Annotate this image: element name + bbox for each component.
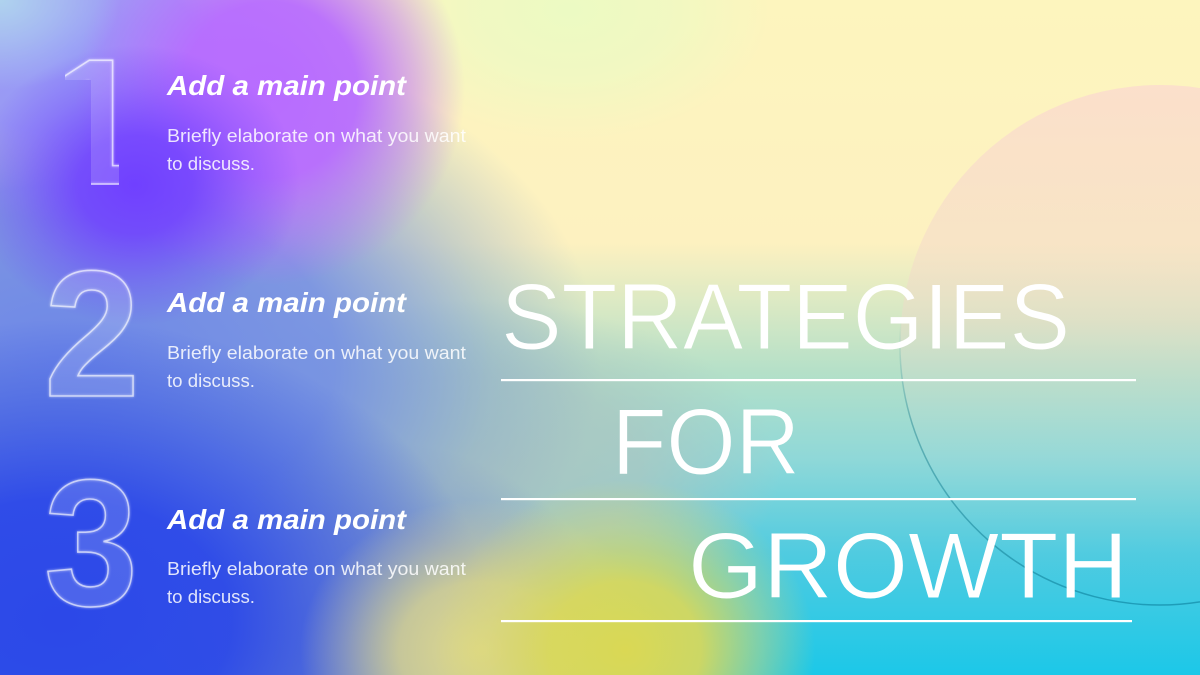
title xyxy=(501,264,1136,622)
title: STRATEGIES xyxy=(501,264,1070,369)
item 2 description: to discuss. xyxy=(167,371,255,391)
item 2 heading: Add a main point xyxy=(166,287,408,318)
item 2 xyxy=(44,234,466,435)
item 1 heading: Add a main point xyxy=(166,70,408,101)
item 1 description: Briefly elaborate on what you want xyxy=(167,126,466,146)
title: FOR xyxy=(612,389,800,494)
numeral 3: 3 xyxy=(44,443,138,644)
translucent circle xyxy=(900,85,1200,605)
numeral 1: 1 xyxy=(46,22,146,223)
item 3 heading: Add a main point xyxy=(166,504,408,535)
item 3 description: Briefly elaborate on what you want xyxy=(167,559,466,579)
item 1 xyxy=(65,58,466,185)
item 3 description: to discuss. xyxy=(167,587,255,607)
title: GROWTH xyxy=(688,513,1128,618)
item 2 description: Briefly elaborate on what you want xyxy=(167,343,466,363)
item 1 description: to discuss. xyxy=(167,154,255,174)
numeral 2: 2 xyxy=(44,234,140,435)
item 3 xyxy=(44,443,466,644)
